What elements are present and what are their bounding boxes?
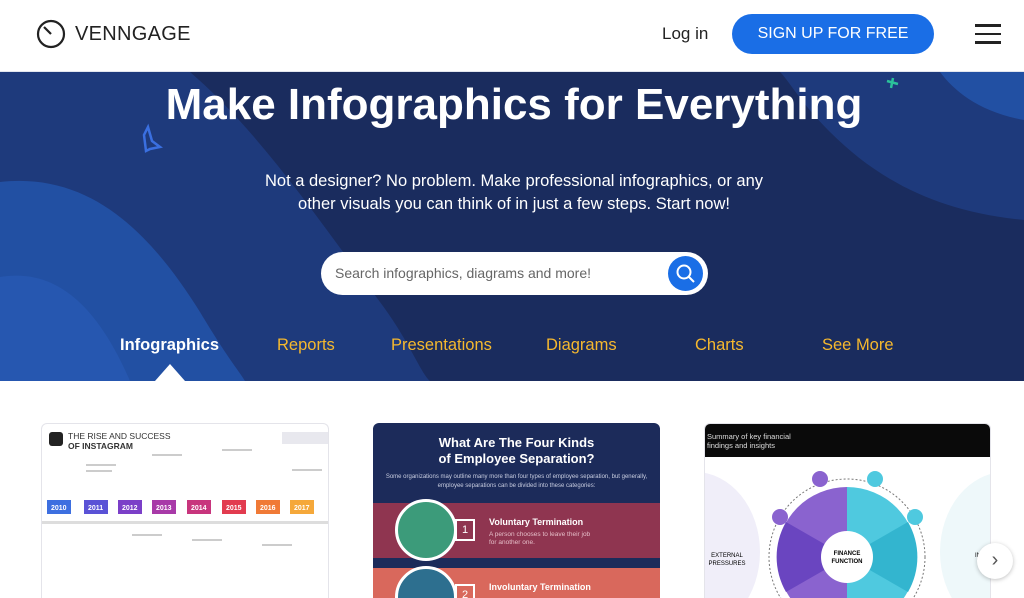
header bar bbox=[0, 0, 1024, 72]
card: instagram timeline: 2017 bbox=[294, 505, 310, 512]
card: finance function: Summary of key financial bbox=[707, 432, 791, 441]
card: instagram timeline: 2010 bbox=[51, 505, 67, 512]
sign up button: SIGN UP FOR FREE bbox=[758, 25, 908, 42]
card: employee separation: of Employee Separation? bbox=[438, 451, 595, 466]
category tabs: Reports bbox=[277, 336, 335, 354]
band: involuntary termination: Involuntary Termination bbox=[489, 582, 591, 592]
category tabs: Diagrams bbox=[546, 336, 617, 354]
card: finance function: findings and insights bbox=[707, 441, 775, 450]
sign up button bbox=[732, 14, 934, 54]
search box: Search infographics, diagrams and more! bbox=[335, 265, 591, 281]
card: finance function bbox=[704, 423, 991, 598]
card: instagram timeline: 2012 bbox=[122, 505, 138, 512]
card: finance function: PRESSURES bbox=[708, 561, 746, 567]
card: instagram timeline: 2014 bbox=[191, 505, 207, 512]
icon: hamburger menu bbox=[975, 24, 1001, 44]
hero background blobs bbox=[0, 72, 1024, 381]
icon: search button bbox=[668, 256, 703, 291]
subtitle: Not a designer? No problem. Make professional infographics, or any other visuals you can think of in just a few steps. Start now! bbox=[265, 172, 763, 213]
card: instagram timeline: OF INSTAGRAM bbox=[68, 441, 133, 451]
card: instagram timeline: 2015 bbox=[226, 505, 242, 512]
band: voluntary termination bbox=[373, 503, 660, 558]
hero section bbox=[0, 72, 1024, 381]
card: instagram timeline bbox=[41, 423, 329, 598]
card: employee separation bbox=[373, 423, 660, 598]
card: instagram timeline: 2016 bbox=[260, 505, 276, 512]
title: Make Infographics for Everything bbox=[166, 80, 862, 129]
band: voluntary termination: 1 bbox=[462, 524, 468, 536]
card: instagram timeline: 2013 bbox=[156, 505, 172, 512]
icon: carousel next arrow: › bbox=[992, 549, 998, 571]
card: employee separation: Some organizations may outline many more than four types of employee separation, but generally, employee separations can be divided into these categories: bbox=[386, 474, 647, 489]
icon: logo clock bbox=[36, 20, 66, 48]
card: finance function: FINANCE bbox=[834, 551, 860, 557]
card: instagram timeline: 2011 bbox=[88, 505, 103, 512]
band: voluntary termination: for another one. bbox=[489, 539, 535, 546]
card: instagram timeline: THE RISE AND SUCCESS bbox=[68, 431, 170, 441]
logo bbox=[36, 20, 191, 48]
band: voluntary termination: Voluntary Termination bbox=[489, 517, 583, 527]
icon: carousel next arrow bbox=[977, 543, 1013, 579]
search box bbox=[321, 252, 708, 295]
login link: Log in bbox=[662, 24, 708, 43]
category tabs: Infographics bbox=[120, 336, 219, 354]
logo: VENNGAGE bbox=[75, 23, 191, 45]
card: employee separation: What Are The Four Kinds bbox=[439, 435, 594, 450]
category tabs: See More bbox=[822, 336, 894, 354]
active tab indicator bbox=[155, 364, 185, 381]
card: finance function: EXTERNAL bbox=[711, 553, 743, 559]
band: voluntary termination: A person chooses to leave their job bbox=[489, 531, 590, 538]
category tabs bbox=[120, 336, 894, 381]
band: involuntary termination bbox=[373, 568, 660, 598]
category tabs: Presentations bbox=[391, 336, 492, 354]
card: finance function: FUNCTION bbox=[832, 559, 862, 565]
category tabs: Charts bbox=[695, 336, 744, 354]
